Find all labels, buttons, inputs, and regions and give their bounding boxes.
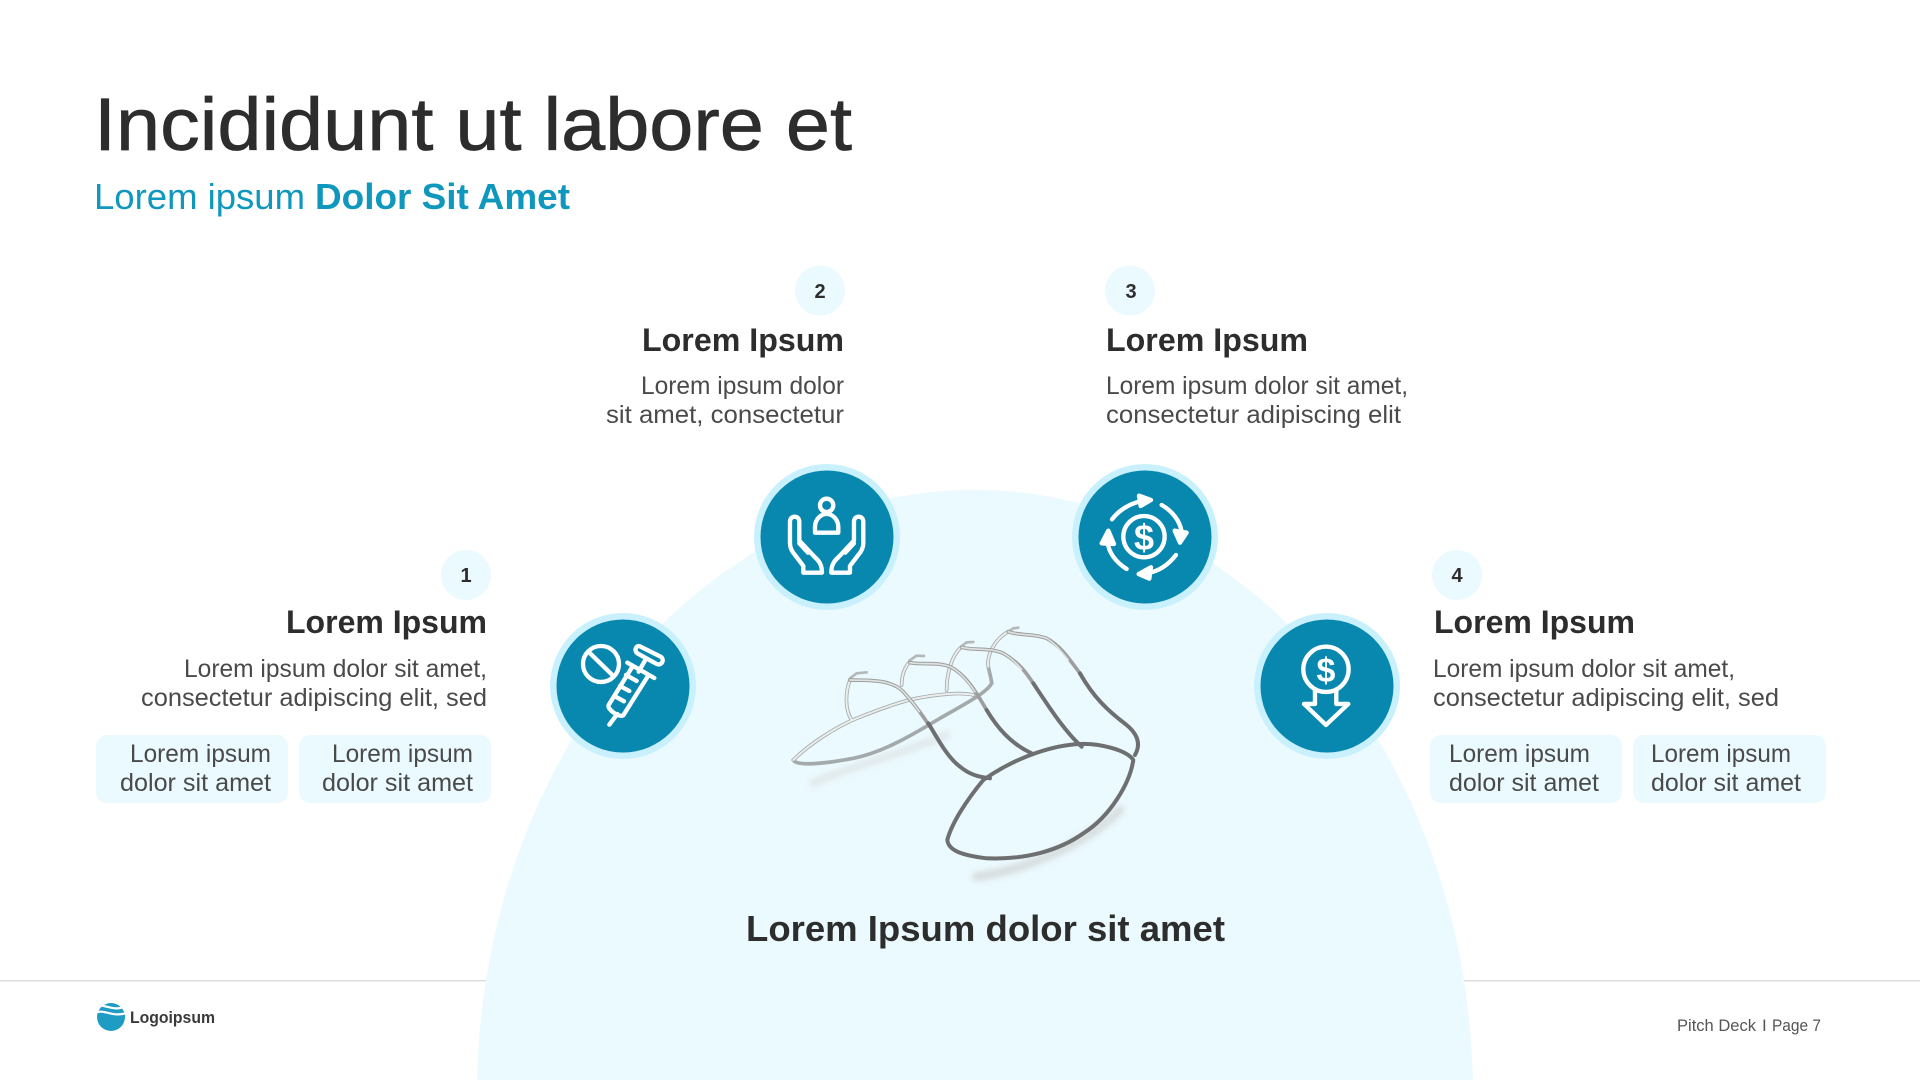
number badge 1 <box>441 550 491 600</box>
body text 3: consectetur adipiscing elit <box>1106 401 1401 429</box>
number badge 1: 1 <box>460 565 472 587</box>
caption: Lorem Ipsum dolor sit amet <box>746 908 1225 949</box>
icon: dollar down arrow: $ <box>1317 652 1336 690</box>
footer page label: Page 7 <box>1772 1016 1821 1035</box>
number badge 2: 2 <box>814 281 826 303</box>
heading 3: Lorem Ipsum <box>1106 322 1308 358</box>
pill 1b: Lorem ipsum <box>332 740 473 768</box>
body text 1 <box>141 655 487 712</box>
body text 3: Lorem ipsum dolor sit amet, <box>1106 372 1408 400</box>
body text 3 <box>1106 372 1408 429</box>
body text 4 <box>1433 655 1779 712</box>
panel: item 2 <box>606 266 845 429</box>
icon: hands holding person <box>754 464 900 610</box>
icon: dollar cycle: $ <box>1134 517 1154 558</box>
icon: dollar cycle <box>1072 464 1218 610</box>
number badge 4 <box>1432 550 1482 600</box>
body text 1: consectetur adipiscing elit, sed <box>141 684 487 712</box>
number badge 4: 4 <box>1451 565 1463 587</box>
pill 1b <box>299 735 491 803</box>
heading 2: Lorem Ipsum <box>642 322 844 358</box>
illustration: wire implant <box>793 628 1138 877</box>
number badge 3: 3 <box>1125 281 1137 303</box>
wires, upper light <box>850 632 1080 727</box>
body text 2: Lorem ipsum dolor <box>641 372 844 400</box>
footer page label: I <box>1762 1016 1767 1035</box>
wires, lower dark <box>928 673 1138 858</box>
panel: central dome background <box>477 490 1473 1080</box>
number badge 3 <box>1105 266 1155 316</box>
pill 1b: dolor sit amet <box>322 769 473 797</box>
panel: item 3 <box>1105 266 1408 429</box>
pill 4b: Lorem ipsum <box>1651 740 1791 768</box>
body text 2: sit amet, consectetur <box>606 401 844 429</box>
pill 1a: dolor sit amet <box>120 769 271 797</box>
logo: Logoipsum <box>130 1008 215 1027</box>
pill 1a <box>96 735 288 803</box>
pill 4a <box>1430 735 1622 803</box>
body text 2 <box>606 372 844 429</box>
body text 1: Lorem ipsum dolor sit amet, <box>184 655 487 683</box>
body text 4: Lorem ipsum dolor sit amet, <box>1433 655 1735 683</box>
pill 4a: dolor sit amet <box>1449 769 1599 797</box>
heading 1: Lorem Ipsum <box>286 604 487 640</box>
pill 4a: Lorem ipsum <box>1449 740 1590 768</box>
number badge 2 <box>795 266 845 316</box>
pill 4b: dolor sit amet <box>1651 769 1801 797</box>
panel: item 4 <box>1430 550 1826 803</box>
back rim, light <box>793 632 1008 764</box>
title: Incididunt ut labore et <box>94 83 852 166</box>
logo <box>95 1003 215 1031</box>
footer page label <box>1677 1016 1821 1035</box>
hooks <box>850 628 1018 678</box>
icon: dollar down arrow <box>1254 613 1400 759</box>
heading 4: Lorem Ipsum <box>1434 604 1635 640</box>
subtitle: Dolor Sit Amet <box>315 176 570 217</box>
subtitle <box>94 176 570 217</box>
body text 4: consectetur adipiscing elit, sed <box>1433 684 1779 712</box>
panel: item 1 <box>96 550 491 803</box>
pill 1a: Lorem ipsum <box>130 740 271 768</box>
subtitle: Lorem ipsum <box>94 176 305 217</box>
pill 4b <box>1633 735 1826 803</box>
footer page label: Pitch Deck <box>1677 1016 1756 1035</box>
icon: no-medication syringe <box>550 613 696 759</box>
